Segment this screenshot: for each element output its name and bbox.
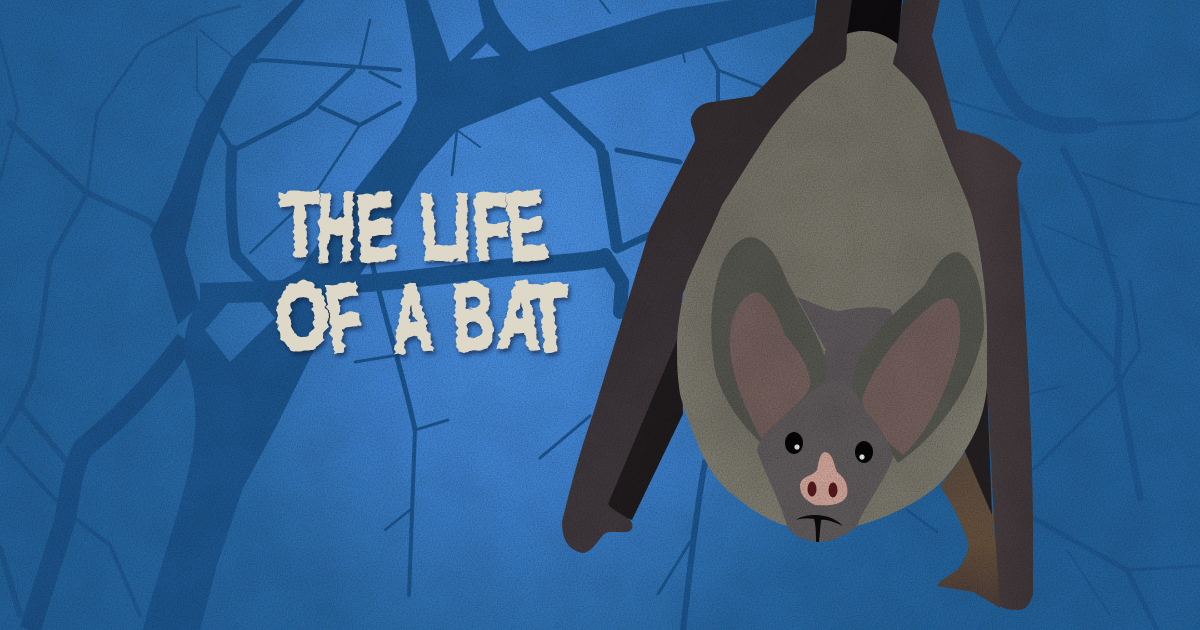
title: F [471, 173, 512, 280]
branches beside and below bat [540, 416, 590, 458]
ear: right [852, 252, 984, 463]
title: O [274, 264, 330, 371]
title: I [454, 176, 470, 281]
face [757, 381, 893, 542]
title: H [315, 175, 357, 281]
title: E [502, 173, 551, 281]
nose [800, 452, 848, 505]
main trunk and thick limb [143, 0, 815, 630]
eyes [785, 432, 803, 454]
right tree [950, 0, 1200, 630]
horizontal branch [200, 258, 605, 292]
wing: left [562, 0, 853, 553]
right branch network [543, 93, 603, 160]
neck band [847, 0, 902, 44]
nostrils [808, 482, 816, 496]
head top [797, 297, 900, 420]
title: T [524, 266, 573, 373]
mouth [796, 515, 843, 542]
ear: left [711, 237, 827, 448]
title: B [451, 264, 497, 371]
title: A [496, 261, 543, 369]
far left tree [0, 6, 240, 615]
title: T [280, 172, 320, 278]
title: E [354, 173, 398, 282]
title [274, 172, 573, 373]
wing: right [893, 0, 1033, 610]
bat [562, 0, 1033, 610]
body [677, 31, 987, 526]
title: F [321, 265, 368, 372]
title: A [390, 266, 434, 373]
title: L [417, 172, 460, 280]
upper fork [448, 0, 532, 64]
thin branch under title [372, 262, 415, 430]
left branch [30, 340, 186, 630]
foot and leg membrane [937, 448, 1000, 608]
